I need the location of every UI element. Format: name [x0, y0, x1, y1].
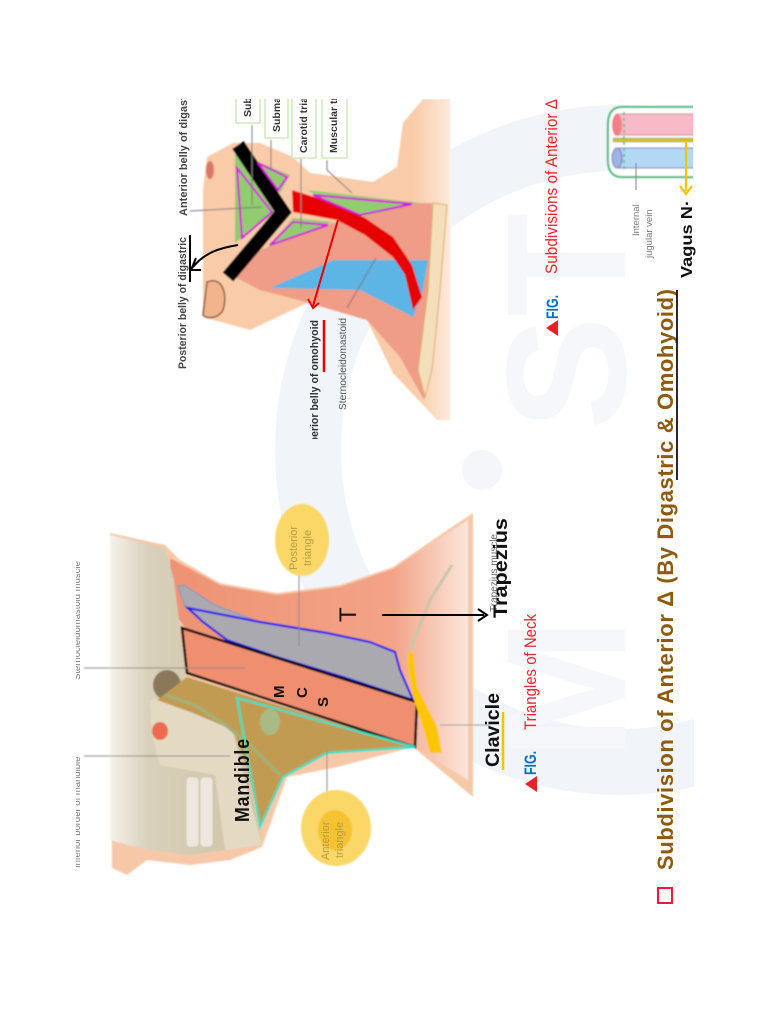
handwritten label: Mandible: Mandible	[232, 738, 254, 822]
skin of head and neck	[203, 99, 450, 420]
handwritten label: SCM	[271, 686, 332, 707]
caption: triangles of neck: Triangles of Neck	[521, 614, 540, 730]
caption: subdivisions of anterior triangle	[542, 99, 562, 336]
boxed labels	[235, 99, 348, 159]
boxed labels: Subm	[242, 88, 254, 117]
struck label: trapezius muscle: Trapezius muscle	[489, 534, 500, 612]
yellow highlight: posterior triangle	[275, 504, 329, 576]
cropped labels at top of figure	[76, 562, 80, 868]
nasal red	[152, 722, 168, 740]
label: internal jugular vein: Internal	[631, 204, 642, 236]
handwritten label: SCM: C	[294, 687, 311, 698]
posterior triangle fill	[178, 585, 413, 700]
handwritten label: T: T	[335, 607, 362, 622]
artery	[616, 114, 706, 135]
SCM muscle with black outline	[182, 628, 417, 747]
label: posterior triangle second line: triangle	[302, 530, 314, 566]
label: anterior triangle: Anterior	[320, 821, 332, 860]
arrow to trapezius	[382, 609, 487, 621]
magenta triangle: carotid	[270, 222, 328, 245]
ear	[203, 281, 225, 318]
label: anterior belly of digastric: Anterior belly of digastric	[178, 83, 190, 216]
label: sternocleidomastoid: Sternocleidomastoid	[337, 318, 349, 410]
leader lines	[190, 125, 376, 308]
skull	[110, 535, 262, 855]
watermark: circular logo	[308, 138, 768, 762]
green field: submental	[235, 153, 275, 243]
yellow highlight: anterior triangle	[301, 790, 371, 866]
clavicle strip	[418, 203, 447, 397]
green field: muscular	[307, 190, 420, 218]
heading: subdivision of anterior triangle: Subdivision of Anterior Δ (By Digastric & Omohyoid)	[653, 289, 678, 870]
neck muscles	[170, 520, 468, 780]
watermark: circular logo: M	[472, 618, 662, 760]
muscle layer	[235, 203, 434, 400]
vagus nerve bar	[613, 138, 703, 142]
watermark: circular logo: ST	[472, 213, 662, 430]
caption: subdivisions of anterior triangle: Subdivisions of Anterior Δ	[542, 99, 561, 274]
teeth	[186, 777, 213, 847]
label: anterior triangle second line: triangle	[334, 822, 346, 858]
caption: triangles of neck: FIG.	[521, 751, 540, 775]
caption: subdivisions of anterior triangle: FIG.	[543, 295, 562, 319]
yellow arrow to vagus	[680, 140, 692, 194]
cropped labels at top of figure: Sternocleidomastoid muscle	[72, 561, 83, 680]
anterior triangle cyan outline	[237, 698, 415, 827]
green field: carotid	[267, 218, 333, 248]
label: posterior triangle: Posterior	[288, 526, 300, 570]
posterior triangle outline	[188, 608, 413, 700]
sternocleidomastoid blue	[270, 260, 428, 317]
leader lines	[84, 570, 327, 805]
figure: lateral neck and skull, triangles of neck	[72, 504, 512, 875]
mandible	[150, 699, 262, 850]
magenta triangle: muscular	[313, 195, 412, 215]
figure: subdivisions of anterior triangle	[178, 99, 450, 439]
vein	[618, 148, 708, 168]
magenta triangle: submandibular	[258, 163, 287, 190]
anterior triangle fill	[157, 677, 413, 827]
heading underline	[676, 290, 678, 480]
digastric black V	[228, 145, 283, 277]
label: jugular vein second line: jugular vein	[644, 209, 655, 259]
boxed labels: Carotid triangle	[298, 75, 310, 153]
magenta triangle: submental	[237, 168, 272, 238]
handwritten label: vagus N: Vagus N·	[679, 200, 696, 278]
handwritten label: Trapezius: Trapezius	[491, 518, 512, 618]
bullet: red square	[658, 888, 672, 903]
label: superior belly of omohyoid: Superior belly of omohyoid	[309, 320, 321, 457]
boxed labels: Muscular triangle	[328, 66, 340, 153]
black pointer to digastric	[190, 235, 238, 282]
red underline and arrow	[323, 320, 325, 372]
handwritten label: SCM: S	[315, 697, 332, 707]
figure: carotid sheath tube	[608, 107, 708, 278]
boxed labels: Submand	[271, 84, 283, 132]
skin outline	[110, 513, 473, 875]
caption: triangles of neck	[521, 614, 540, 792]
lip	[206, 161, 214, 179]
cropped labels at top of figure: Inferior border of mandible	[72, 757, 83, 868]
ear opening	[153, 670, 181, 700]
handwritten label: SCM: M	[271, 686, 288, 698]
leader	[635, 163, 637, 190]
green field: submandibular	[262, 164, 290, 194]
clavicle yellow	[408, 652, 442, 753]
label: posterior belly of digastric: Posterior belly of digastric	[177, 237, 189, 369]
handwritten label: Clavicle: Clavicle	[483, 693, 504, 767]
omohyoid red	[292, 190, 422, 310]
